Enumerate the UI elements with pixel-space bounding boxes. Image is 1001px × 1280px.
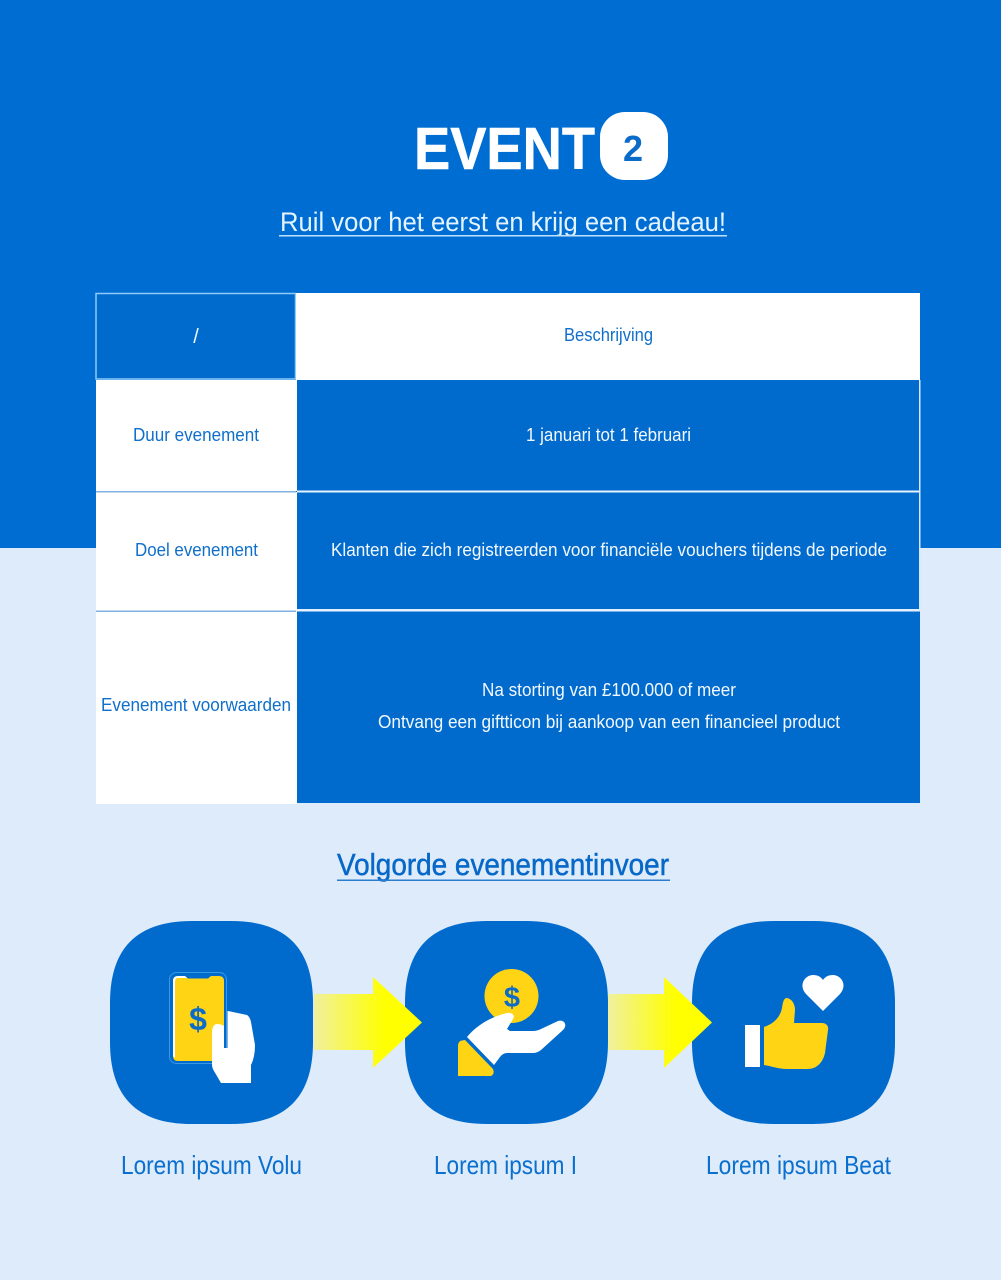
row: Doel evenement: Doel evenement	[135, 540, 258, 560]
subtitle: Ruil voor het eerst en krijg een cadeau!	[280, 207, 726, 237]
arrow 1	[314, 977, 422, 1068]
table header: Beschrijving: Beschrijving	[564, 325, 653, 345]
icon: hand holding coin: $	[504, 982, 520, 1014]
step 3 tile	[692, 921, 895, 1124]
step 2 tile	[405, 921, 608, 1124]
row: Evenement voorwaarden: Evenement voorwaarden	[101, 695, 291, 715]
row: Duur evenement	[96, 380, 920, 491]
row: Duur evenement: Duur evenement	[133, 425, 259, 445]
row: Evenement voorwaarden: Ontvang een giftticon bij aankoop van een financieel product	[378, 712, 840, 732]
step 2 label: Lorem ipsum I	[434, 1150, 577, 1180]
table header: Beschrijving	[296, 293, 920, 380]
step 1 tile	[110, 921, 313, 1124]
badge: number 2	[600, 112, 668, 180]
title: EVENT	[414, 116, 595, 182]
arrow 2	[608, 977, 712, 1068]
badge: number 2: 2	[623, 128, 643, 169]
row: Evenement voorwaarden: Na storting van £100.000 of meer	[482, 680, 736, 700]
step 3 label: Lorem ipsum Beat	[706, 1150, 892, 1180]
row: Doel evenement	[96, 492, 920, 611]
table header: slash cell: /	[193, 326, 199, 348]
icon: thumbs up and heart	[745, 975, 844, 1069]
row: Doel evenement: Klanten die zich registreerden voor financiële vouchers tijdens de periode	[331, 540, 887, 560]
section heading: Volgorde evenementinvoer	[337, 847, 669, 882]
row: Duur evenement: 1 januari tot 1 februari	[526, 425, 691, 445]
row: Evenement voorwaarden	[96, 611, 920, 804]
table header: slash cell	[96, 294, 296, 379]
step 1 label: Lorem ipsum Volu	[121, 1150, 302, 1180]
icon: hand holding coin	[458, 969, 565, 1076]
table	[96, 293, 920, 804]
icon: phone and hand	[170, 972, 255, 1083]
icon: phone and hand: $	[189, 1001, 207, 1037]
